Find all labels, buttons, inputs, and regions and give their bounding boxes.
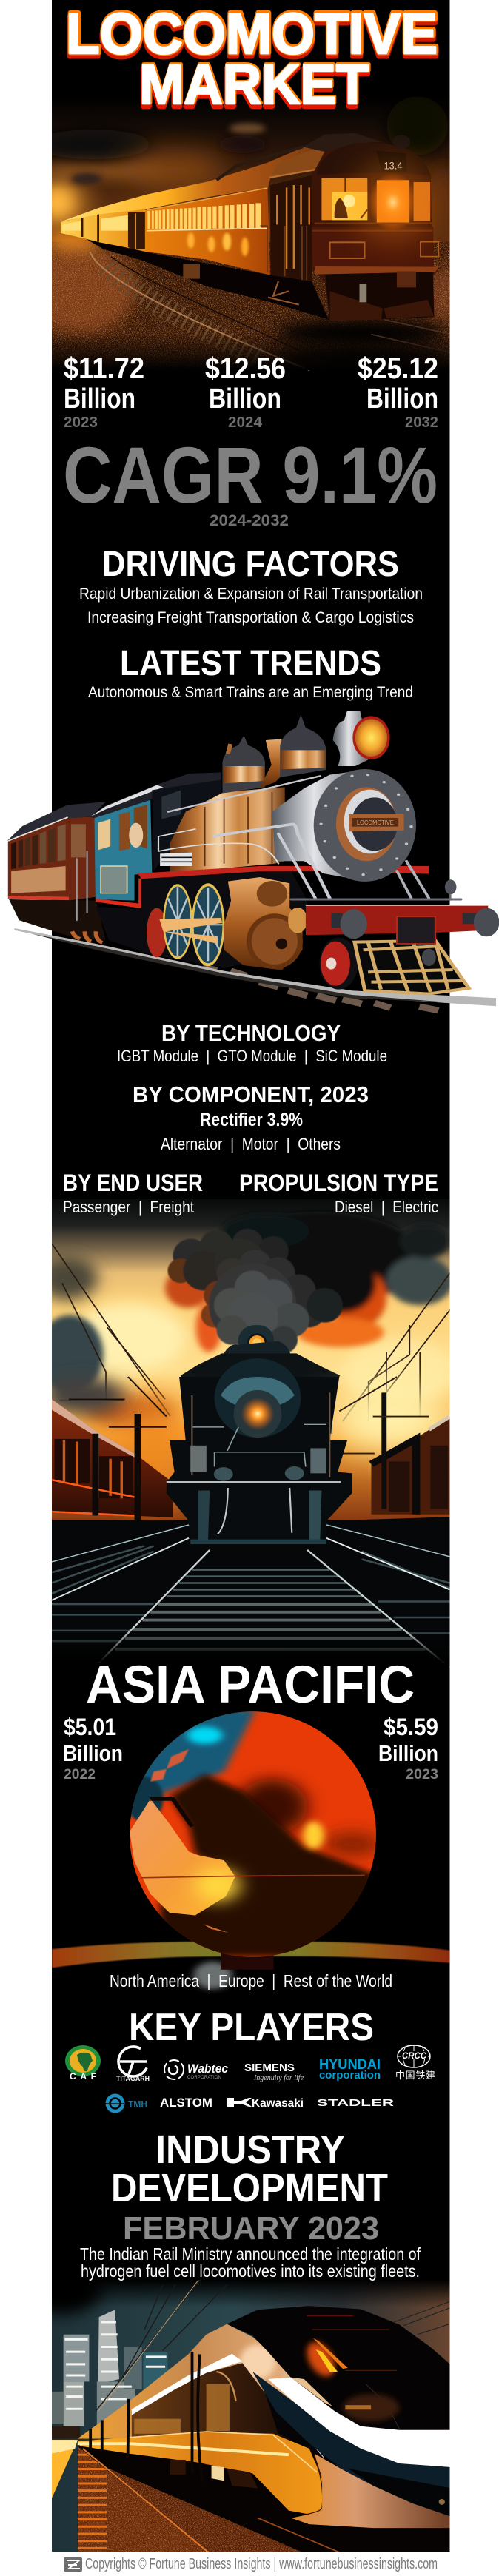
cowcatcher (355, 941, 469, 994)
industry development heading: INDUSTRY (155, 2127, 345, 2172)
regional value 2022: 2022 (64, 1767, 96, 1782)
silver smokebox (272, 770, 365, 881)
cab (90, 772, 221, 908)
white streak (268, 2378, 452, 2467)
globe (125, 1709, 381, 1959)
logo: Hyundai Corporation (319, 2057, 381, 2082)
title: Locomotive Market: LOCOMOTIVE (67, 0, 438, 65)
by end user: BY END USER (63, 1170, 203, 1196)
regional value 2022: Billion (63, 1740, 123, 1766)
horizon band (52, 1942, 449, 1968)
logo: Wabtec: CORPORATION (187, 2076, 221, 2080)
scene: night train in the rain (24, 96, 458, 370)
latest trends: Autonomous & Smart Trains are an Emerging Trend (88, 684, 413, 701)
white band (132, 2354, 242, 2415)
domes and pipe (222, 714, 326, 794)
by technology (117, 1020, 387, 1065)
stand (221, 1951, 274, 1970)
market value 2024: Billion (209, 383, 281, 415)
market value 2032: 2032 (405, 415, 438, 431)
vestibule door (261, 175, 312, 281)
chassis (96, 871, 307, 968)
regional value 2023: Billion (378, 1740, 438, 1766)
logo: CAF (65, 2045, 101, 2082)
logo: CRCC: CRCC (402, 2050, 426, 2061)
propulsion type: PROPULSION TYPE (239, 1170, 438, 1196)
market value 2024: 2024 (228, 415, 263, 431)
logo: CAF: CAF (70, 2071, 96, 2082)
overhead wires left (69, 1377, 167, 1427)
smokebox face with rivets: LOCOMOTIVE (357, 819, 394, 826)
by component: BY COMPONENT, 2023 (133, 1081, 369, 1107)
driving factors: Increasing Freight Transportation & Cargo Logistics (87, 609, 414, 626)
logo: TMH: TMH (128, 2099, 147, 2110)
rails (52, 1525, 449, 1676)
industry development heading: DEVELOPMENT (111, 2166, 388, 2210)
market value 2032 (358, 352, 438, 431)
copper cylinder (224, 877, 303, 970)
logo: Stadler: STADLER (317, 2097, 395, 2108)
scene: glowing globe (52, 1709, 449, 1989)
by technology: IGBT Module | GTO Module | SiC Module (117, 1047, 387, 1065)
logo: Wabtec: Wabtec (187, 2062, 228, 2076)
driving factors: DRIVING FACTORS (102, 545, 399, 584)
billowing smoke puffs (167, 1229, 343, 1353)
logo: Hyundai Corporation: corporation (319, 2069, 381, 2082)
market value 2024 (205, 352, 286, 431)
market value 2023: $11.72 (64, 352, 144, 385)
logo: Alstom: ALSTOM (160, 2096, 212, 2110)
title: Locomotive Market: MARKET (139, 53, 369, 116)
destination plate (376, 150, 407, 172)
logo: TMH (105, 2093, 147, 2113)
driving factors: Rapid Urbanization & Expansion of Rail Transportation (79, 586, 423, 603)
driving factors (79, 545, 423, 626)
red buffer beam (288, 879, 499, 966)
propulsion type (239, 1170, 438, 1216)
headlight (301, 2338, 348, 2381)
cream lower nose (291, 2454, 452, 2528)
by end user: Passenger | Freight (63, 1198, 194, 1216)
by component: Rectifier 3.9% (200, 1110, 303, 1130)
regional value 2023: $5.59 (384, 1714, 438, 1740)
roof line (61, 140, 322, 221)
far carriages (61, 205, 146, 252)
development description: The Indian Rail Ministry announced the integration of (80, 2244, 421, 2264)
left coach (52, 1399, 173, 1520)
logo: Hyundai Corporation: HYUNDAI (319, 2057, 381, 2073)
market value 2032: Billion (366, 383, 438, 415)
by component (133, 1081, 369, 1153)
logo: CRCC: 中国铁建 (395, 2067, 435, 2082)
by end user (63, 1170, 203, 1216)
title: Locomotive Market: LOCOMOTIVE (66, 4, 438, 69)
ground (24, 233, 458, 370)
asia pacific heading: ASIA PACIFIC (86, 1656, 415, 1714)
market value 2032: $25.12 (358, 352, 438, 385)
market value 2023: 2023 (64, 415, 98, 431)
title: Locomotive Market: MARKET (139, 56, 369, 119)
title: Locomotive Market: MARKET (140, 53, 369, 115)
logo: CRCC (395, 2045, 435, 2082)
logo: Wabtec (164, 2060, 228, 2080)
upper peach body (78, 2324, 330, 2438)
market value 2024: $12.56 (205, 352, 286, 385)
by technology: BY TECHNOLOGY (161, 1020, 341, 1046)
overhead wires (52, 1244, 452, 1421)
regional value 2022: $5.01 (64, 1714, 116, 1740)
lower orange body (78, 2432, 322, 2515)
smokebox face with rivets (314, 769, 416, 882)
destination plate: 13.4 (384, 161, 403, 172)
window glass (132, 2363, 305, 2447)
CAGR figure: 2024-2032 (210, 512, 289, 529)
rail and sleepers (14, 928, 496, 1010)
scene: steam engine on the tracks (36, 1199, 456, 1678)
development description: hydrogen fuel cell locomotives into its existing fleets. (81, 2261, 420, 2281)
propulsion type: Diesel | Electric (335, 1198, 438, 1216)
dark blue flank (252, 2372, 452, 2517)
locomotive body (167, 1358, 352, 1544)
logo: Titagarh: TITAGARH (116, 2075, 150, 2082)
key players heading: KEY PLAYERS (129, 2006, 374, 2049)
city skyline (52, 2310, 167, 2426)
development description (80, 2244, 421, 2281)
train front, coaches and rails (41, 1358, 452, 1678)
regional value 2023: 2023 (406, 1767, 438, 1782)
logo: Titagarh (113, 2042, 153, 2082)
handrails and pipes (77, 776, 461, 920)
main carriage side (146, 188, 270, 275)
illustration: steam locomotive (7, 711, 499, 1010)
logo: Kawasaki (227, 2097, 304, 2110)
latest trends: LATEST TRENDS (120, 644, 381, 683)
market value 2023 (64, 352, 144, 431)
regional value 2023 (378, 1714, 438, 1782)
logo: Siemens: SIEMENS (244, 2062, 295, 2074)
latest trends (88, 644, 413, 701)
loco dome and lamp (181, 1325, 341, 1434)
CAGR figure: CAGR 9.1% (63, 430, 438, 520)
ground and track (52, 2440, 452, 2555)
headlamp (333, 711, 390, 766)
cab windows (321, 172, 438, 258)
front of cab (312, 142, 441, 321)
undercarriage (83, 237, 329, 320)
driving wheels (147, 883, 224, 966)
doors (89, 2352, 201, 2463)
by component: Alternator | Motor | Others (161, 1135, 341, 1153)
right coach (333, 1377, 449, 1515)
ground (129, 1517, 450, 1535)
track (90, 252, 452, 370)
sky and smoke (36, 1199, 456, 1520)
front wheel (319, 938, 358, 990)
boiler (170, 787, 285, 873)
title: Locomotive Market (66, 0, 438, 119)
regional value 2022 (63, 1714, 123, 1782)
industry development heading (111, 2127, 388, 2247)
red running board (138, 866, 429, 879)
dark back smoke (165, 1212, 453, 1352)
logo: Kawasaki: Kawasaki (252, 2097, 304, 2110)
black background panel (52, 0, 450, 2552)
passenger coach (7, 802, 106, 942)
industry development heading: FEBRUARY 2023 (123, 2210, 379, 2247)
black nose (227, 2306, 452, 2430)
title: Locomotive Market: LOCOMOTIVE (66, 1, 438, 66)
other regions: North America | Europe | Rest of the World (110, 1971, 392, 1990)
logo: Siemens: Ingenuity for life (253, 2073, 304, 2082)
logo: Siemens (244, 2062, 304, 2082)
market value 2023: Billion (64, 383, 135, 415)
scene: modern high-speed train (52, 2280, 450, 2552)
